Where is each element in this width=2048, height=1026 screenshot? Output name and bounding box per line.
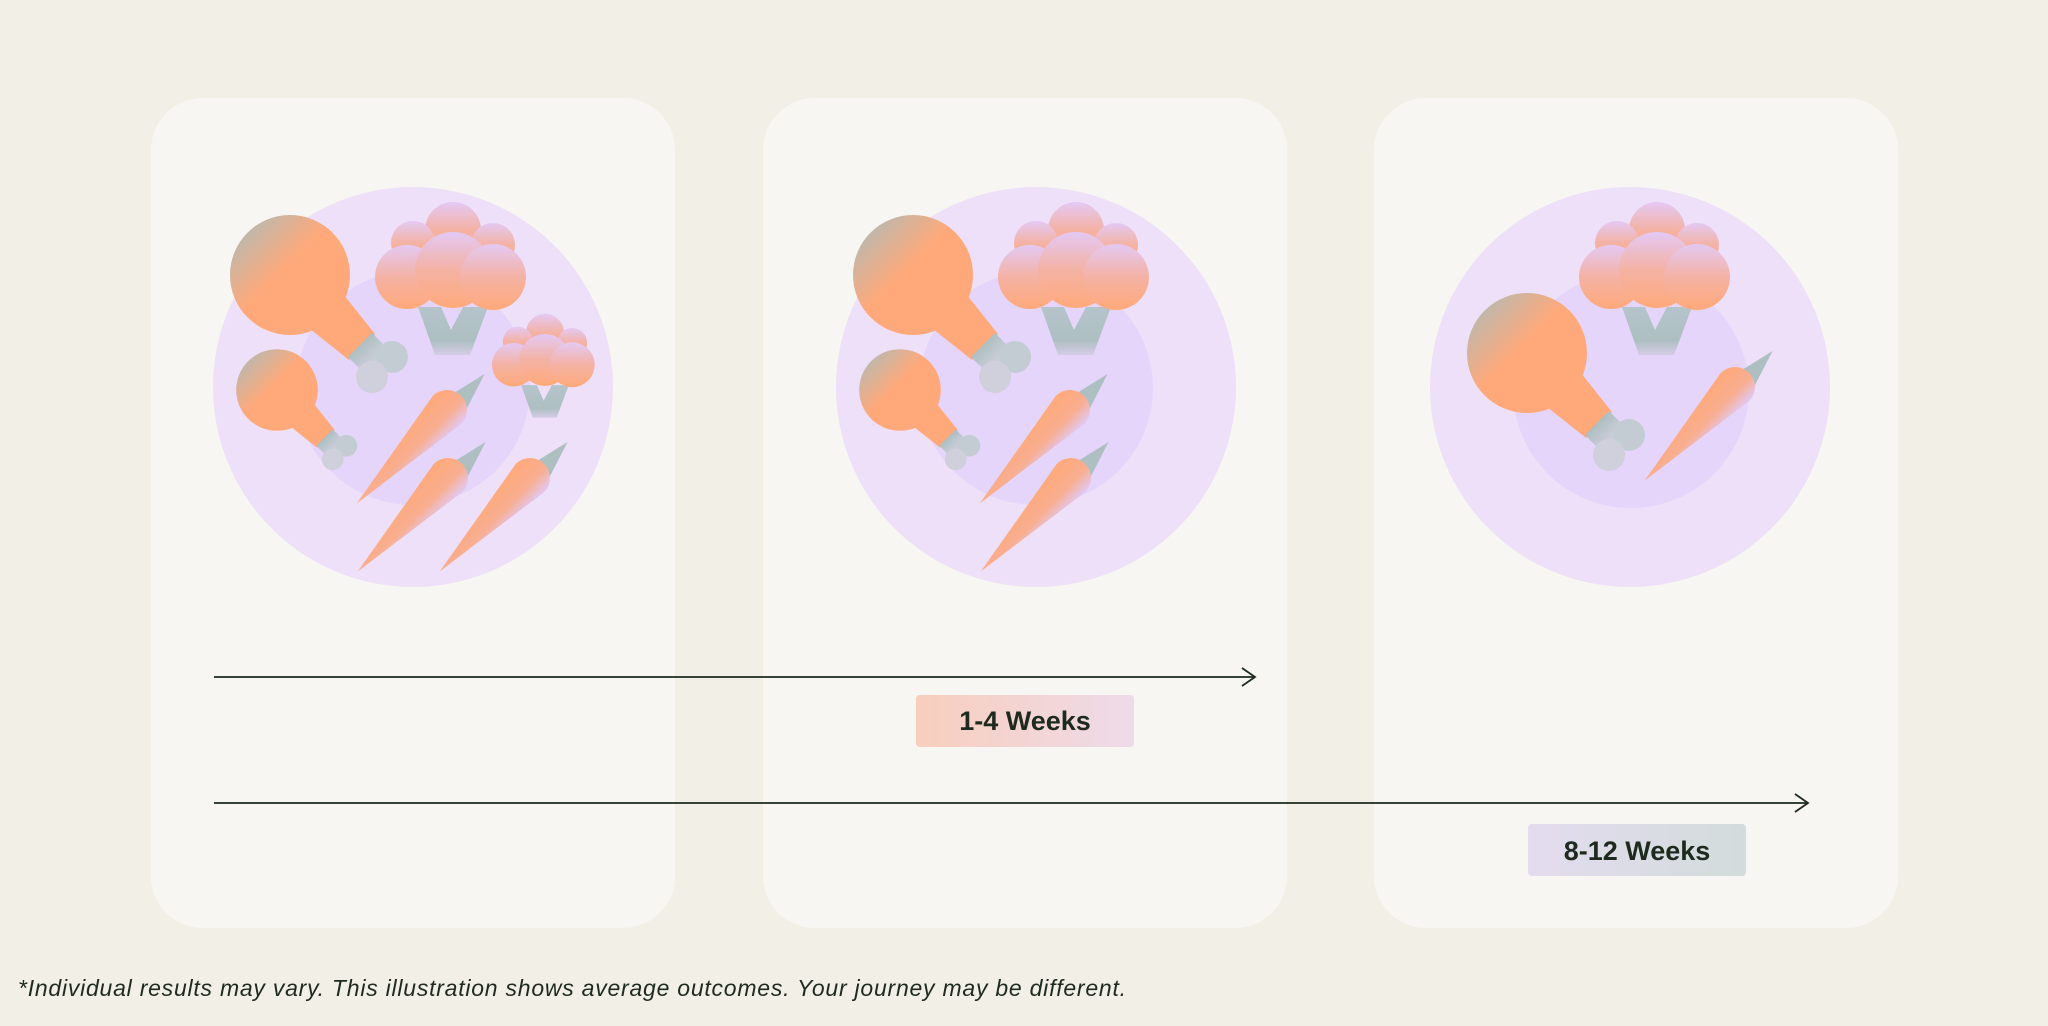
- plate 1: [213, 187, 613, 587]
- label: 1-4 Weeks: [916, 695, 1134, 747]
- icon: carrot 1: [342, 359, 498, 517]
- footnote: *Individual results may vary. This illustration shows average outcomes. Your journey may be different.: [18, 975, 1126, 1001]
- label: 1-4 Weeks: 1-4 Weeks: [959, 706, 1091, 736]
- arrow: 1-4 weeks: [214, 668, 1255, 686]
- icon: broccoli: [1579, 202, 1730, 355]
- plate 3: [1430, 187, 1830, 587]
- label: 8-12 Weeks: 8-12 Weeks: [1564, 836, 1710, 866]
- icon: carrot 1: [965, 359, 1121, 517]
- icon: broccoli small: [492, 314, 595, 418]
- panel: card 2: [763, 98, 1287, 928]
- icon: drumstick small: [236, 349, 357, 470]
- icon: broccoli: [998, 202, 1149, 355]
- icon: drumstick: [1467, 293, 1645, 471]
- icon: drumstick small: [859, 349, 980, 470]
- icon: carrot 2: [343, 427, 499, 585]
- icon: carrot 3: [425, 427, 581, 585]
- panel: card 1: [151, 98, 675, 928]
- plate 2: [836, 187, 1236, 587]
- icon: broccoli large: [375, 202, 526, 355]
- arrow: 8-12 weeks: [214, 794, 1808, 812]
- icon: drumstick large: [230, 215, 408, 393]
- panel: card 3: [1374, 98, 1898, 928]
- icon: carrot 2: [966, 427, 1122, 585]
- icon: carrot: [1630, 336, 1786, 494]
- label: 8-12 Weeks: [1528, 824, 1746, 876]
- icon: drumstick large: [853, 215, 1031, 393]
